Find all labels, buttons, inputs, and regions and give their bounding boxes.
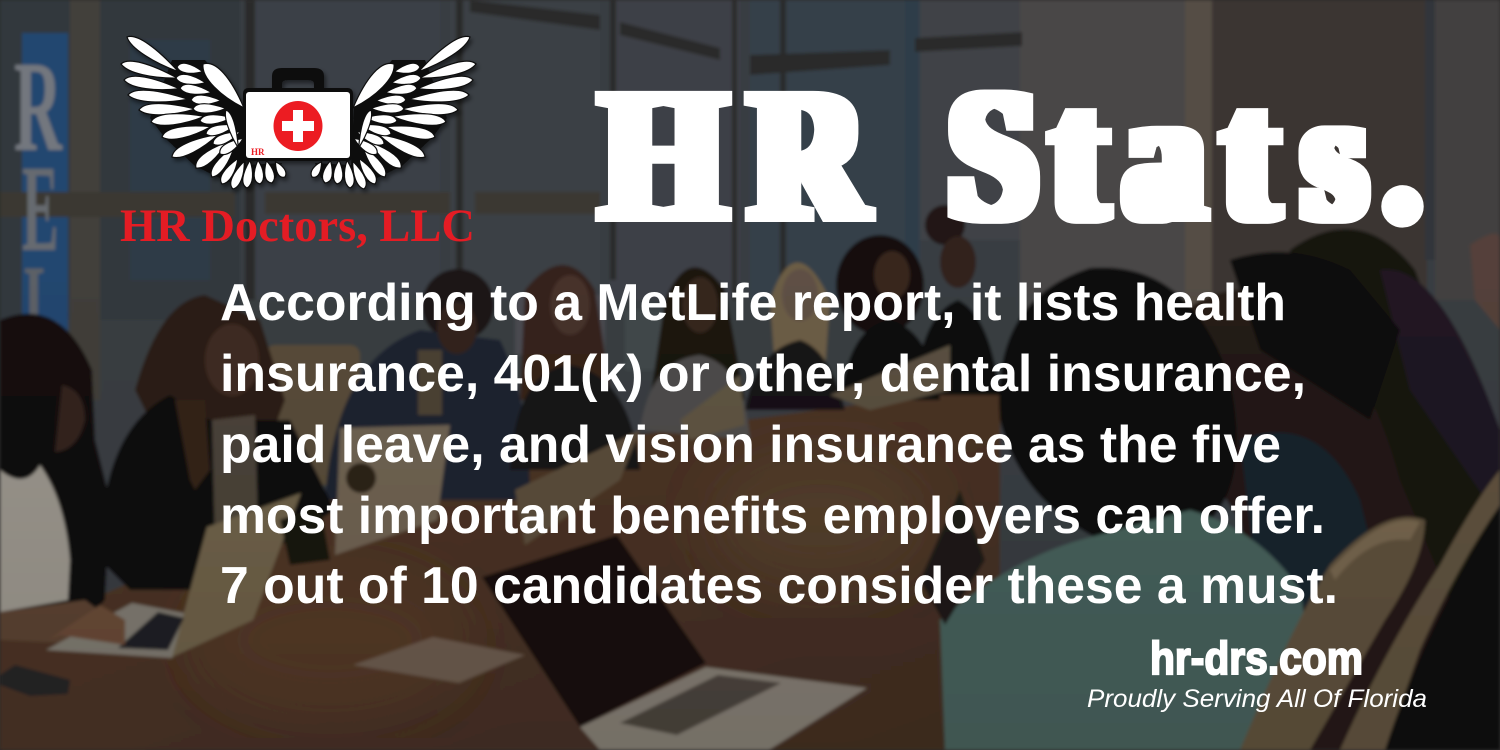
body text: 7 out of 10 candidates consider these a must. [220,557,1338,615]
body text: paid leave, and vision insurance as the five [220,416,1281,474]
tagline: Proudly Serving All Of Florida [1087,685,1427,713]
laptops [335,425,450,555]
logo: HR Doctors [120,32,477,252]
banner letters: L [24,241,60,371]
body text [220,274,1338,615]
background people [265,345,360,485]
icon: right wing [309,32,477,191]
table [0,385,1000,750]
body text: According to a MetLife report, it lists health [220,274,1286,332]
banner letters [14,35,63,371]
body text: most important benefits employers can offer. [220,487,1325,545]
banner letters: R [14,35,63,179]
banner letters: E [22,140,58,277]
body text: insurance, 401(k) or other, dental insurance, [220,345,1306,403]
icon: winged medical bag [120,32,477,191]
company name: HR Doctors, LLC [120,200,475,252]
chairs [1240,517,1425,750]
title: HR Stats [602,50,1365,259]
website: hr-drs.com [1150,632,1363,684]
lower-right seated people [1250,229,1500,750]
icon: left wing [120,32,288,191]
icon: medical bag: HR [251,147,265,157]
icon: bag handle [272,68,324,90]
icon: medical bag [243,88,353,161]
window frames [245,0,1435,300]
left foreground women [0,314,110,640]
title: . [1379,51,1426,260]
